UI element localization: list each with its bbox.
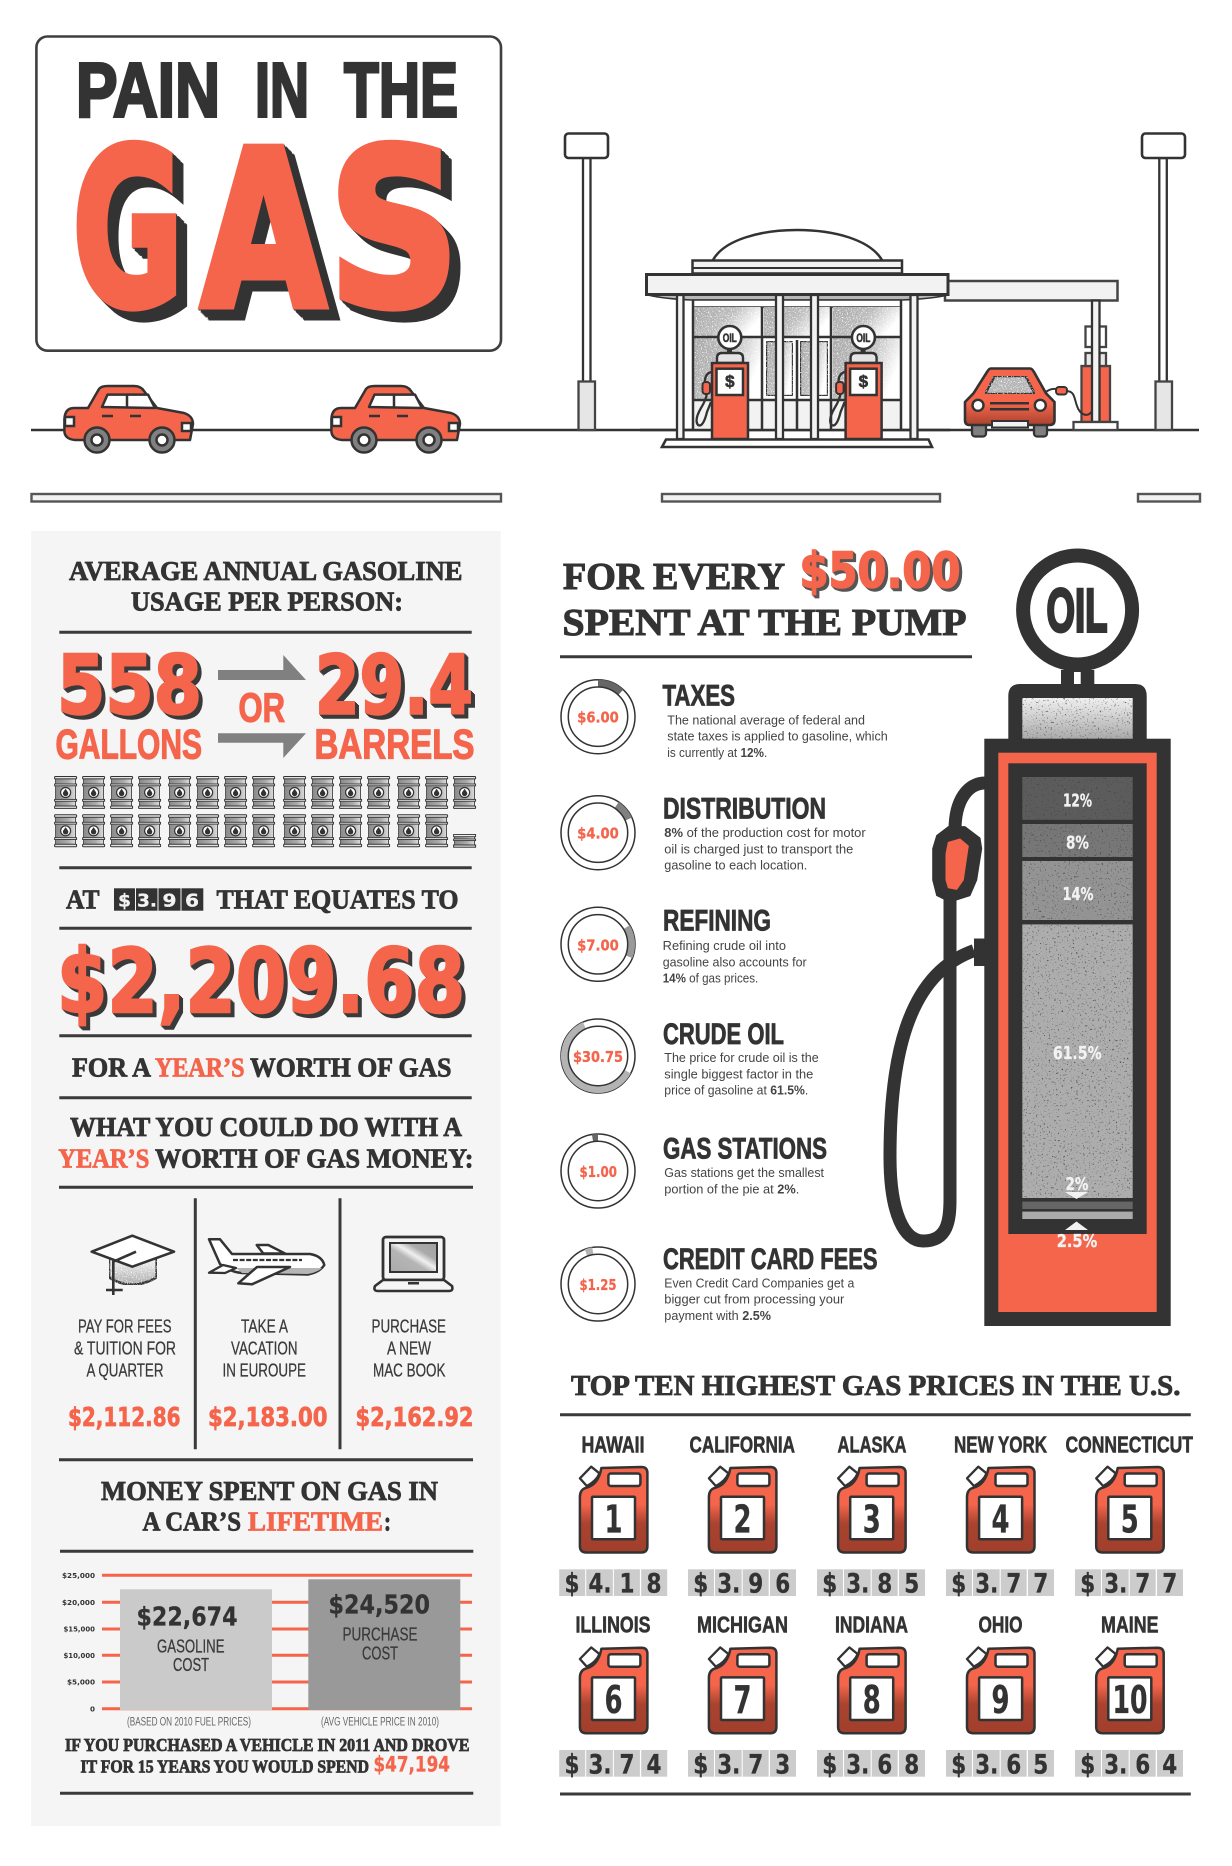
state: ohio bbox=[946, 1612, 1054, 1780]
station pump left bbox=[697, 326, 748, 439]
state: california: 9 bbox=[748, 1569, 763, 1600]
heading: what you could do: YEAR’S bbox=[58, 1143, 149, 1173]
state: ohio: 3. bbox=[975, 1749, 998, 1780]
car one bbox=[64, 386, 193, 452]
callout: 15 year total bbox=[65, 1735, 470, 1777]
item: taxes: TAXES bbox=[662, 680, 735, 713]
sign: title board bbox=[36, 36, 501, 358]
state: maine: 4 bbox=[1162, 1749, 1177, 1780]
state: hawaii: 1 bbox=[604, 1497, 622, 1542]
stat: 29.4 barrels: BARRELS bbox=[314, 720, 474, 767]
state: indiana: $ bbox=[822, 1749, 837, 1780]
ring: crude oil: $30.75 bbox=[573, 1048, 623, 1066]
ring: crude oil bbox=[561, 1019, 635, 1093]
heading: average annual gasoline usage bbox=[69, 556, 462, 617]
item: distribution: DISTRIBUTION bbox=[663, 792, 826, 825]
item: refining: REFINING bbox=[663, 905, 771, 938]
station canopy extension bbox=[945, 281, 1118, 300]
caption: tuition: A QUARTER bbox=[86, 1360, 164, 1381]
state: california: 2 bbox=[734, 1497, 752, 1542]
large fuel pump bbox=[890, 556, 1164, 1319]
state: connecticut bbox=[1066, 1431, 1193, 1600]
ring: taxes bbox=[561, 680, 635, 754]
item: refining: gasoline also accounts for bbox=[663, 955, 807, 969]
caption: vacation bbox=[222, 1315, 306, 1381]
item: gas stations: Gas stations get the smallest bbox=[664, 1166, 825, 1180]
item: taxes: state taxes is applied to gasoline, which bbox=[667, 730, 888, 744]
item: gas stations: GAS STATIONS bbox=[663, 1132, 827, 1165]
state: michigan: $ bbox=[693, 1749, 708, 1780]
item: gas stations: portion of the pie at 2%. bbox=[664, 1182, 799, 1196]
state: hawaii: 4. bbox=[588, 1569, 612, 1600]
prices: what you could buy: $2,183.00 bbox=[208, 1403, 328, 1433]
bar: gasoline cost: GASOLINE bbox=[157, 1635, 224, 1656]
callout: 15 year total: IF YOU PURCHASED A VEHICLE IN 2011 AND DROVE bbox=[65, 1735, 470, 1755]
state: indiana: INDIANA bbox=[835, 1612, 908, 1638]
station pump right bbox=[830, 326, 882, 439]
lamp post left bbox=[565, 134, 608, 430]
state: new york: 7 bbox=[1006, 1569, 1021, 1600]
state: hawaii bbox=[559, 1431, 667, 1600]
segment: 14 percent: 14% bbox=[1062, 884, 1094, 905]
item: refining bbox=[561, 905, 807, 986]
bar: purchase cost bbox=[308, 1579, 460, 1710]
state: indiana: 8 bbox=[863, 1678, 881, 1723]
state: new york: 7 bbox=[1033, 1569, 1048, 1600]
state: maine: 6 bbox=[1135, 1749, 1150, 1780]
caption: laptop: PURCHASE bbox=[372, 1315, 446, 1336]
station windows bbox=[693, 307, 901, 430]
panel: left column background bbox=[31, 531, 501, 1826]
state: maine: 3. bbox=[1104, 1749, 1127, 1780]
ring: credit card fees: $1.25 bbox=[580, 1276, 616, 1294]
icon: graduation cap bbox=[92, 1236, 174, 1295]
item: credit card fees: Even Credit Card Companies get a bbox=[664, 1276, 854, 1290]
heading: for every $50 bbox=[562, 542, 966, 644]
item: taxes: is currently at 12%. bbox=[667, 746, 767, 760]
heading: money spent in car lifetime: : bbox=[384, 1507, 391, 1537]
segment: 2.5 percent bbox=[1022, 1212, 1133, 1252]
item: distribution: gasoline to each location. bbox=[664, 859, 807, 873]
item: credit card fees bbox=[561, 1243, 878, 1323]
item: crude oil: CRUDE OIL bbox=[663, 1018, 784, 1051]
arrow: top bbox=[218, 655, 306, 680]
pump hose and nozzle bbox=[890, 783, 986, 1241]
item: refining: Refining crude oil into bbox=[663, 939, 786, 953]
state: hawaii: HAWAII bbox=[582, 1431, 644, 1457]
heading: what you could do: WHAT YOU COULD DO WITH A bbox=[70, 1112, 462, 1142]
ring: refining: $7.00 bbox=[577, 936, 619, 954]
arrow: bottom bbox=[218, 733, 306, 758]
state: connecticut: 7 bbox=[1135, 1569, 1150, 1600]
caption: tuition: PAY FOR FEES bbox=[78, 1315, 172, 1336]
item: gas stations bbox=[561, 1132, 827, 1208]
prices: what you could buy: $2,162.92 bbox=[356, 1403, 474, 1433]
state: new york: 3. bbox=[975, 1569, 998, 1600]
state: ohio: 6 bbox=[1006, 1749, 1021, 1780]
heading: what you could do: WORTH OF GAS MONEY: bbox=[155, 1143, 474, 1173]
state: michigan: 7 bbox=[734, 1678, 752, 1723]
segment: 8 percent bbox=[1022, 824, 1133, 857]
state: alaska: ALASKA bbox=[838, 1431, 906, 1457]
bar: gasoline cost: COST bbox=[173, 1654, 209, 1675]
axis labels: $10,000 bbox=[64, 1652, 95, 1660]
item: taxes: The national average of federal and bbox=[667, 713, 865, 727]
ring: distribution bbox=[561, 796, 635, 870]
item: crude oil bbox=[561, 1018, 819, 1098]
line: for a year's worth of gas bbox=[72, 1053, 452, 1083]
station pump left: $ bbox=[725, 372, 735, 391]
axis labels: $25,000 bbox=[62, 1572, 95, 1580]
stat: 558 gallons: 558 bbox=[57, 640, 202, 734]
lamp post right bbox=[1142, 134, 1185, 430]
state: california: CALIFORNIA bbox=[690, 1431, 795, 1457]
state: indiana: 6 bbox=[877, 1749, 892, 1780]
ring: credit card fees bbox=[561, 1247, 635, 1321]
state: michigan: 3. bbox=[717, 1749, 740, 1780]
state: new york bbox=[946, 1431, 1054, 1600]
item: refining: 14% of gas prices. bbox=[663, 972, 758, 986]
pump body bbox=[991, 746, 1164, 1319]
station pump left: OIL bbox=[723, 331, 737, 345]
axis labels: $15,000 bbox=[64, 1626, 95, 1634]
ring: taxes: $6.00 bbox=[577, 709, 619, 727]
icon row: oil barrels bbox=[55, 776, 476, 847]
state: maine: $ bbox=[1080, 1749, 1095, 1780]
line: at price that equates to bbox=[66, 884, 458, 914]
caption: laptop: MAC BOOK bbox=[373, 1360, 446, 1381]
state: illinois: ILLINOIS bbox=[576, 1612, 650, 1638]
caption: laptop: A NEW bbox=[387, 1338, 431, 1358]
state: alaska: 5 bbox=[904, 1569, 919, 1600]
stat: 29.4 barrels: 29.4 bbox=[315, 640, 473, 734]
state: alaska: 8 bbox=[877, 1569, 892, 1600]
state: connecticut: CONNECTICUT bbox=[1066, 1431, 1193, 1457]
pump sign: oil: OIL bbox=[1046, 576, 1108, 644]
segment: 61.5 percent: 61.5% bbox=[1053, 1043, 1102, 1064]
axis labels bbox=[62, 1572, 95, 1714]
title: pain in the bbox=[76, 48, 458, 134]
item: crude oil: price of gasoline at 61.5%. bbox=[664, 1084, 808, 1098]
front view car bbox=[965, 368, 1092, 436]
bar chart: lifetime cost bbox=[62, 1572, 472, 1728]
callout: 15 year total: IT FOR 15 YEARS YOU WOULD SPEND bbox=[80, 1757, 369, 1777]
item: taxes bbox=[561, 680, 888, 760]
far fuel pump bbox=[1074, 300, 1118, 430]
line: at price that equates to: THAT EQUATES TO bbox=[216, 884, 458, 914]
state: ohio: 9 bbox=[992, 1678, 1010, 1723]
station pump right: OIL bbox=[856, 331, 870, 345]
segment: 12 percent bbox=[1022, 777, 1133, 820]
stat: 29.4 barrels bbox=[314, 640, 474, 767]
caption: tuition bbox=[74, 1315, 176, 1381]
ring: gas stations bbox=[561, 1134, 635, 1208]
title: gas: S bbox=[328, 104, 460, 357]
axis labels: $5,000 bbox=[67, 1678, 95, 1686]
car two bbox=[331, 386, 460, 452]
state: hawaii: $ bbox=[564, 1569, 580, 1600]
station pump right: $ bbox=[859, 372, 869, 391]
segment: 14 percent bbox=[1022, 861, 1133, 920]
chart notes bbox=[127, 1716, 439, 1728]
gas station building bbox=[640, 230, 1118, 447]
state: connecticut: $ bbox=[1080, 1569, 1095, 1600]
caption: tuition: & TUITION FOR bbox=[74, 1338, 176, 1358]
price cells: 3.96 bbox=[114, 888, 203, 912]
price cells: 3.96: 9 bbox=[162, 890, 176, 912]
stat: yearly total: $2,209.68 bbox=[57, 930, 465, 1033]
state: illinois bbox=[559, 1612, 667, 1780]
item: crude oil: single biggest factor in the bbox=[664, 1067, 813, 1081]
pump top bbox=[1008, 684, 1147, 739]
state: maine: 10 bbox=[1112, 1678, 1148, 1723]
state: california: $ bbox=[693, 1569, 708, 1600]
line: for a year's worth of gas: FOR A bbox=[72, 1053, 151, 1083]
state: alaska bbox=[817, 1431, 925, 1600]
state: hawaii: 8 bbox=[646, 1569, 662, 1600]
axis labels: 0 bbox=[90, 1706, 95, 1714]
heading: for every $50: SPENT AT THE PUMP bbox=[562, 602, 966, 644]
state: michigan: MICHIGAN bbox=[697, 1612, 788, 1638]
state: connecticut: 7 bbox=[1162, 1569, 1177, 1600]
title: gas bbox=[72, 104, 460, 358]
heading: money spent in car lifetime: MONEY SPENT ON GAS IN bbox=[101, 1476, 438, 1506]
state: alaska: $ bbox=[822, 1569, 837, 1600]
segment: 12 percent: 12% bbox=[1063, 791, 1092, 812]
segment: 61.5 percent bbox=[1022, 924, 1133, 1198]
caption: vacation: TAKE A bbox=[241, 1315, 288, 1336]
bar: gasoline cost: $22,674 bbox=[136, 1603, 238, 1633]
caption: vacation: VACATION bbox=[231, 1338, 298, 1358]
bar: purchase cost: COST bbox=[362, 1642, 398, 1663]
stat: 558 gallons: GALLONS bbox=[56, 720, 202, 767]
title: gas: G bbox=[72, 104, 184, 357]
bar: purchase cost: PURCHASE bbox=[342, 1624, 418, 1645]
state: illinois: 6 bbox=[604, 1678, 622, 1723]
bar: gasoline cost bbox=[120, 1589, 272, 1710]
heading: money spent in car lifetime: LIFETIME bbox=[248, 1507, 383, 1537]
segment: 2 percent bbox=[1022, 1174, 1133, 1209]
road dashes bbox=[32, 494, 1200, 502]
stat: 558 gallons bbox=[56, 640, 202, 767]
title: pain in the: IN bbox=[255, 48, 309, 134]
state: michigan: 7 bbox=[748, 1749, 763, 1780]
line: for a year's worth of gas: YEAR’S bbox=[155, 1053, 244, 1083]
state: michigan bbox=[688, 1612, 796, 1780]
label: or: OR bbox=[238, 685, 285, 731]
caption: vacation: IN EUROUPE bbox=[222, 1360, 306, 1381]
line: for a year's worth of gas: WORTH OF GAS bbox=[250, 1053, 452, 1083]
heading: for every $50: FOR EVERY bbox=[563, 556, 785, 598]
prices: what you could buy: $2,112.86 bbox=[68, 1403, 180, 1433]
icon: airplane bbox=[209, 1239, 324, 1284]
state: california bbox=[688, 1431, 796, 1600]
ring: refining bbox=[561, 907, 635, 981]
chart notes: (BASED ON 2010 FUEL PRICES) bbox=[127, 1716, 251, 1728]
state: california: 6 bbox=[775, 1569, 790, 1600]
state: alaska: 3. bbox=[846, 1569, 869, 1600]
callout: 15 year total: $47,194 bbox=[374, 1753, 450, 1777]
heading: average annual gasoline usage: AVERAGE ANNUAL GASOLINE bbox=[69, 556, 462, 586]
state: california: 3. bbox=[717, 1569, 740, 1600]
state: new york: NEW YORK bbox=[954, 1431, 1047, 1457]
state: hawaii: 1 bbox=[620, 1569, 634, 1600]
state: new york: 4 bbox=[992, 1497, 1010, 1542]
state: indiana: 3. bbox=[846, 1749, 869, 1780]
bar: purchase cost: $24,520 bbox=[328, 1590, 430, 1620]
item: distribution: 8% of the production cost for motor bbox=[664, 826, 866, 840]
chart notes: (AVG VEHICLE PRICE IN 2010) bbox=[321, 1716, 439, 1728]
title: pain in the: PAIN bbox=[76, 48, 220, 134]
heading: money spent in car lifetime bbox=[101, 1476, 438, 1537]
state: maine bbox=[1075, 1612, 1183, 1780]
line: at price that equates to: AT bbox=[66, 884, 100, 914]
segment: 2.5 percent: 2.5% bbox=[1057, 1231, 1097, 1252]
title: pain in the: THE bbox=[344, 48, 458, 134]
price cells: 3.96: $ bbox=[118, 890, 131, 912]
state: alaska: 3 bbox=[863, 1497, 881, 1542]
price cells: 3.96: 6 bbox=[185, 890, 199, 912]
pump window: price breakdown bbox=[1008, 763, 1147, 1252]
title: gas: A bbox=[200, 105, 326, 358]
price cells: 3.96: 3. bbox=[137, 890, 157, 912]
pump sign: oil bbox=[1023, 556, 1132, 685]
item: credit card fees: CREDIT CARD FEES bbox=[663, 1243, 878, 1276]
state: indiana bbox=[817, 1612, 925, 1780]
segment: 8 percent: 8% bbox=[1066, 833, 1089, 854]
state: connecticut: 5 bbox=[1121, 1497, 1139, 1542]
heading: what you could do bbox=[58, 1112, 474, 1173]
item: distribution: oil is charged just to transport the bbox=[664, 842, 853, 856]
station base bbox=[662, 440, 932, 447]
item: credit card fees: payment with 2.5% bbox=[664, 1309, 771, 1323]
state: connecticut: 3. bbox=[1104, 1569, 1127, 1600]
state: maine: MAINE bbox=[1101, 1612, 1158, 1638]
heading: top ten: TOP TEN HIGHEST GAS PRICES IN THE U.S. bbox=[571, 1371, 1180, 1402]
state: indiana: 8 bbox=[904, 1749, 919, 1780]
ring: distribution: $4.00 bbox=[577, 825, 619, 843]
item: crude oil: The price for crude oil is the bbox=[664, 1051, 819, 1065]
state: illinois: $ bbox=[564, 1749, 580, 1780]
heading: money spent in car lifetime: A CAR’S bbox=[142, 1507, 241, 1537]
item: distribution bbox=[561, 792, 866, 873]
heading: for every $50: $50.00 bbox=[800, 542, 960, 600]
state: illinois: 3. bbox=[588, 1749, 612, 1780]
ring: gas stations: $1.00 bbox=[580, 1163, 617, 1181]
segment: 2 percent: 2% bbox=[1066, 1174, 1088, 1195]
state: ohio: 5 bbox=[1033, 1749, 1048, 1780]
state: new york: $ bbox=[951, 1569, 966, 1600]
state: illinois: 4 bbox=[646, 1749, 662, 1780]
heading: average annual gasoline usage: USAGE PER PERSON: bbox=[131, 587, 403, 617]
state: ohio: $ bbox=[951, 1749, 966, 1780]
axis labels: $20,000 bbox=[62, 1599, 95, 1607]
prices: what you could buy bbox=[68, 1403, 474, 1433]
state: ohio: OHIO bbox=[978, 1612, 1022, 1638]
state: michigan: 3 bbox=[775, 1749, 790, 1780]
icon: laptop bbox=[374, 1237, 452, 1291]
caption: laptop bbox=[372, 1315, 446, 1381]
road line bbox=[31, 429, 1199, 431]
state: illinois: 7 bbox=[620, 1749, 634, 1780]
item: credit card fees: bigger cut from processing your bbox=[664, 1293, 844, 1307]
